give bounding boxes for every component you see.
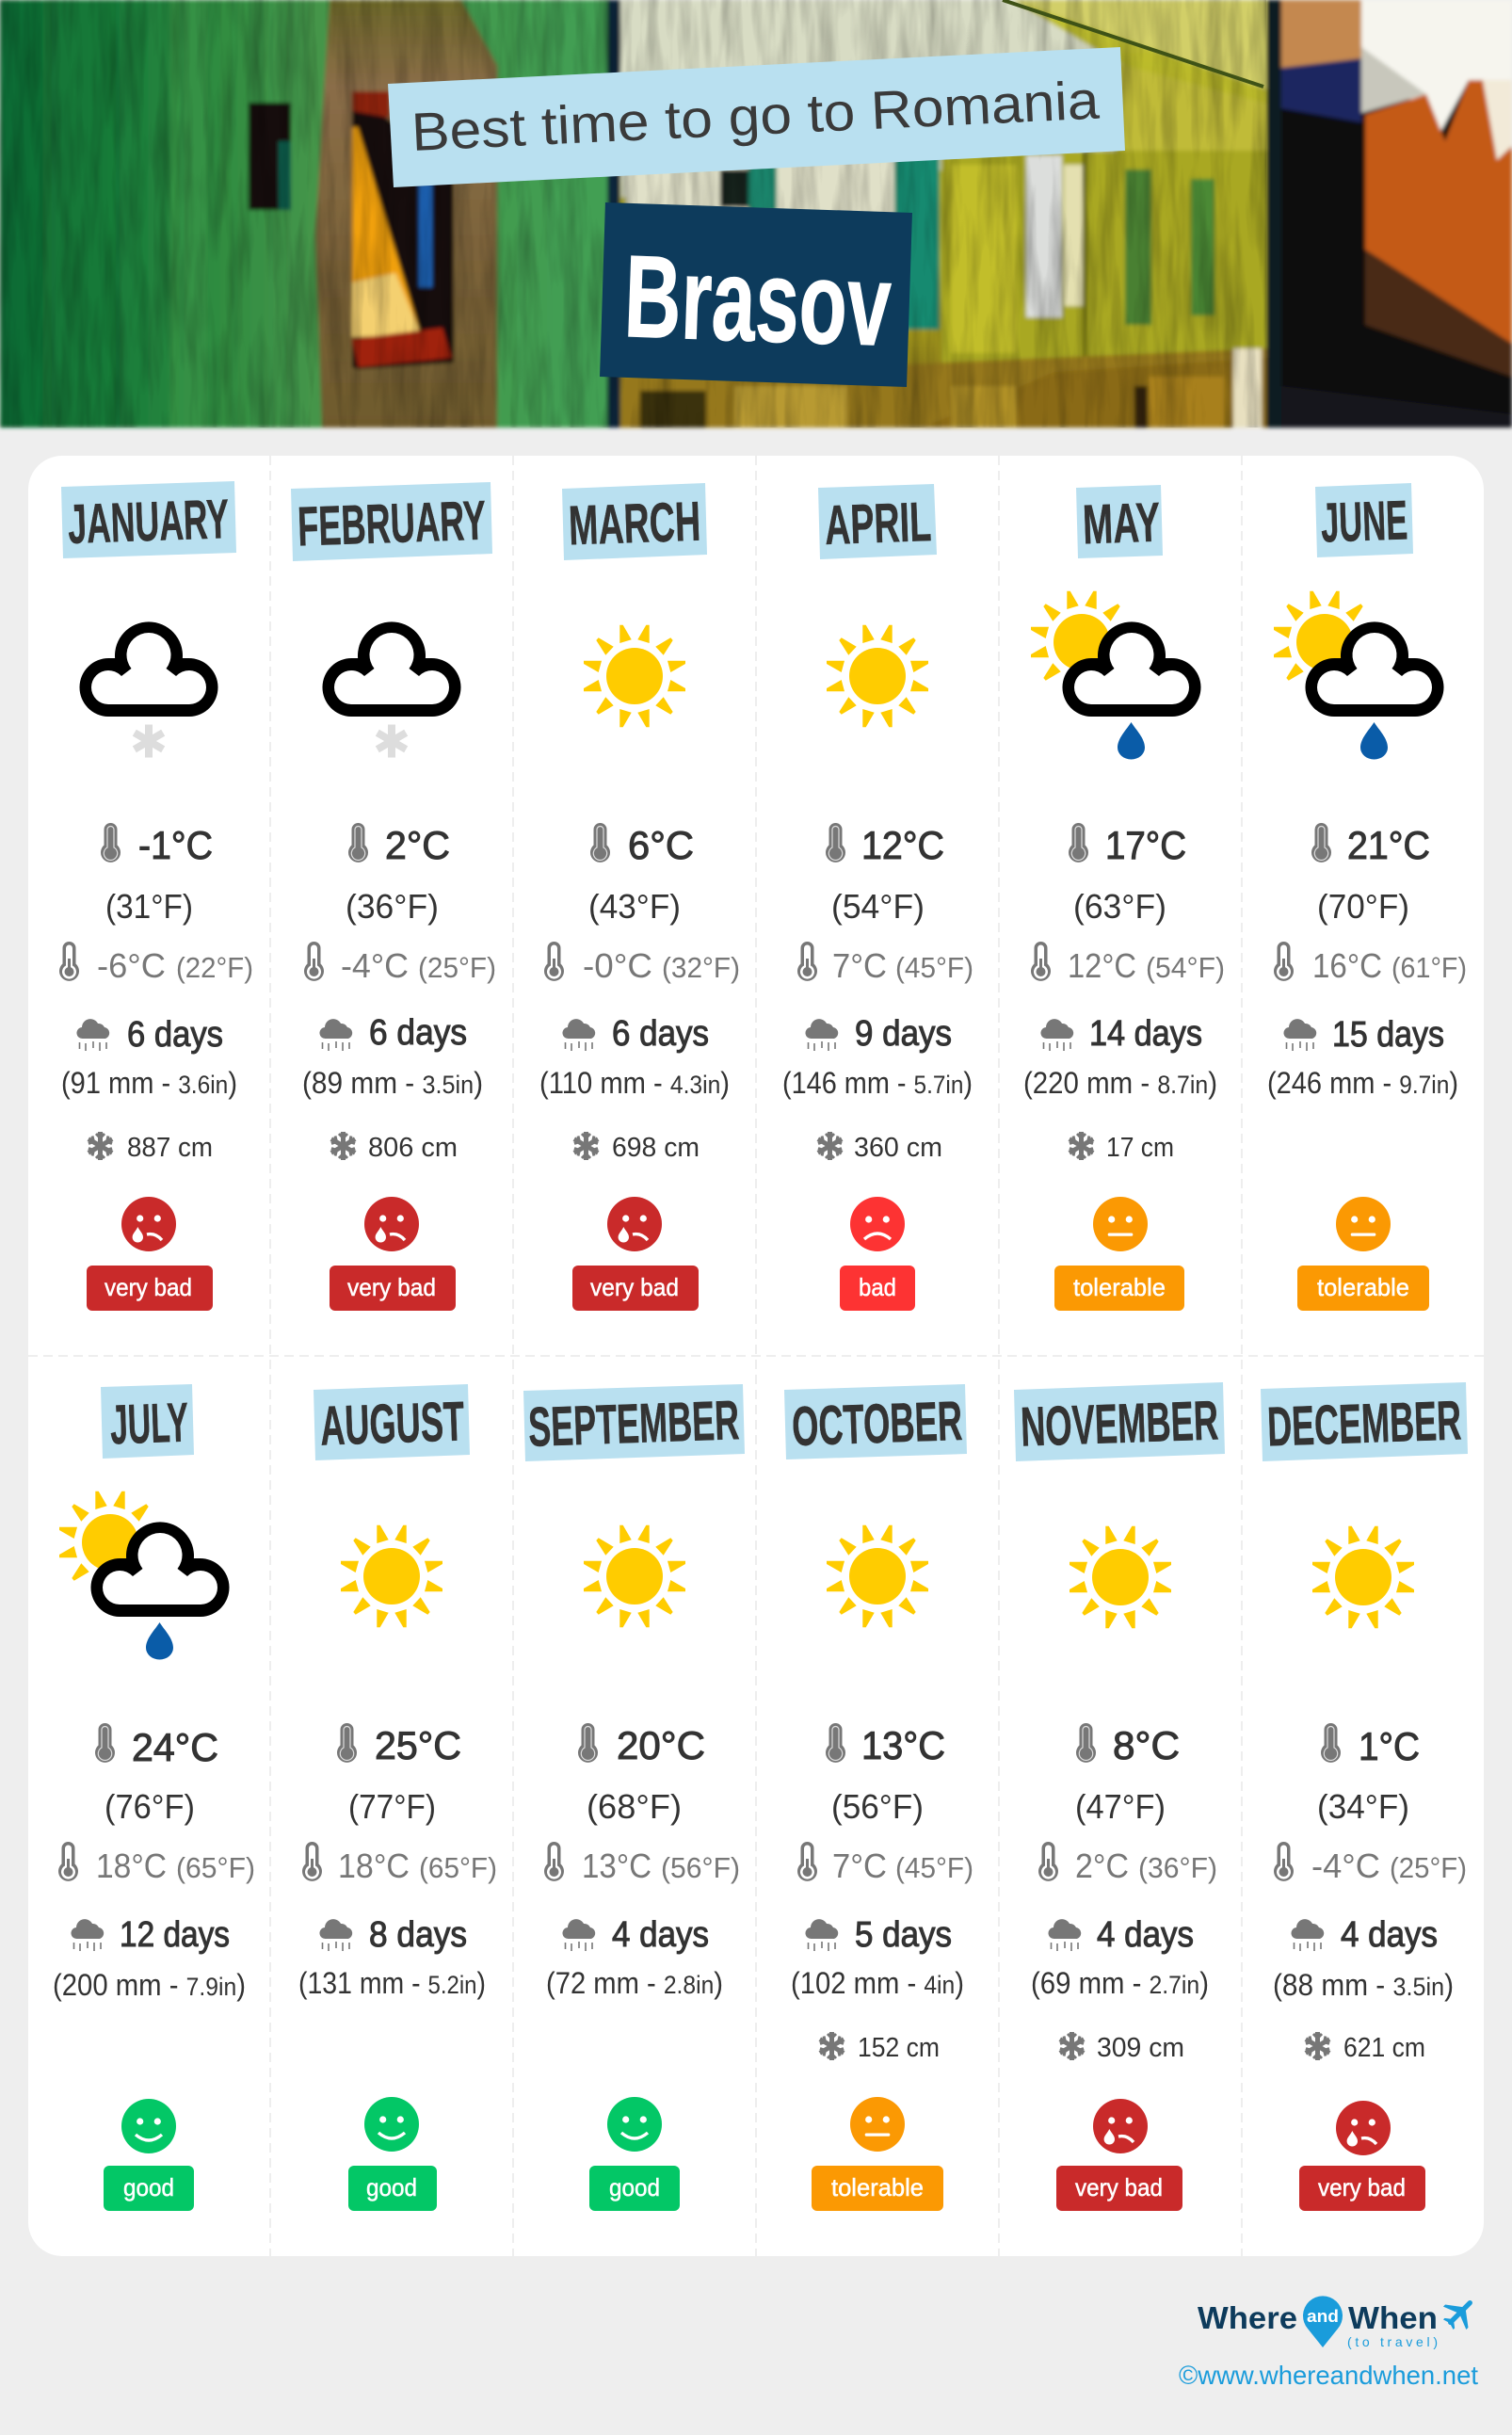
high temperature	[101, 823, 213, 867]
rating face	[121, 2099, 176, 2153]
low temperature	[1038, 1842, 1217, 1885]
month heading: JUNE	[1320, 489, 1408, 555]
high temperature: 12°C	[861, 823, 944, 867]
low temperature: 16°C	[1312, 946, 1382, 985]
snowfall: 887 cm	[127, 1133, 213, 1163]
snowfall: 621 cm	[1343, 2033, 1425, 2063]
low temperature	[1274, 942, 1467, 985]
low temperature: 18°C	[338, 1846, 410, 1885]
low temperature: (25°F)	[418, 951, 496, 984]
weather icon: sun	[584, 625, 685, 727]
low temperature: (61°F)	[1391, 951, 1467, 984]
rating badge	[348, 2166, 437, 2211]
rating badge	[812, 2166, 943, 2211]
rating face	[1093, 2099, 1148, 2153]
rating badge	[572, 1266, 699, 1311]
low temperature: -4°C	[341, 946, 409, 985]
rating badge: tolerable	[1073, 1273, 1166, 1301]
precipitation: (200 mm - 7.9in)	[53, 1968, 246, 2002]
rainy days	[319, 1915, 467, 1955]
low temperature	[797, 942, 973, 985]
precipitation: (131 mm - 5.2in)	[298, 1966, 486, 2000]
panel: February	[291, 482, 496, 1311]
low temperature: 7°C	[832, 946, 887, 985]
logo: Where and When to travel: When	[1348, 2300, 1438, 2335]
month heading: OCTOBER	[791, 1390, 963, 1458]
high temperature: 2°C	[385, 823, 450, 867]
low temperature	[304, 942, 496, 985]
weather icon: sun	[827, 625, 928, 727]
rainy days	[805, 1915, 952, 1955]
weather icon: sun	[1070, 1526, 1171, 1628]
precipitation: (72 mm - 2.8in)	[546, 1966, 723, 2000]
low temperature: -4°C	[1311, 1846, 1380, 1885]
high temperature fahrenheit: (63°F)	[1073, 887, 1166, 926]
high temperature: 20°C	[617, 1723, 705, 1767]
low temperature: (45°F)	[895, 951, 973, 984]
precipitation: (69 mm - 2.7in)	[1031, 1966, 1209, 2000]
high temperature	[1069, 823, 1186, 867]
month heading	[562, 483, 707, 560]
month heading: APRIL	[824, 491, 932, 556]
precipitation: (89 mm - 3.5in)	[302, 1066, 483, 1100]
precipitation: (91 mm - 3.6in)	[61, 1066, 237, 1100]
panel: August	[298, 1384, 497, 2211]
month heading: MAY	[1082, 492, 1161, 556]
high temperature: 6°C	[628, 823, 694, 867]
rating badge: good	[609, 2173, 660, 2201]
title banner: Best time to go to Romania	[388, 47, 1125, 187]
logo: Where and When to travel	[1198, 2290, 1483, 2349]
low temperature: 18°C	[96, 1846, 167, 1885]
rating badge: very bad	[347, 1273, 436, 1301]
rainy days	[1283, 1015, 1444, 1055]
rainy days	[805, 1014, 952, 1054]
low temperature	[59, 942, 253, 985]
high temperature fahrenheit: (56°F)	[831, 1787, 924, 1826]
snowfall: 360 cm	[854, 1133, 942, 1163]
panel: October	[784, 1384, 973, 2211]
rating badge: good	[123, 2173, 174, 2201]
low temperature: 13°C	[582, 1846, 651, 1885]
rainy days: 4 days	[1341, 1915, 1438, 1955]
high temperature fahrenheit: (34°F)	[1317, 1787, 1409, 1826]
month heading: JULY	[109, 1392, 189, 1456]
low temperature: (32°F)	[662, 951, 740, 984]
high temperature fahrenheit: (77°F)	[348, 1787, 436, 1826]
rainy days	[562, 1915, 709, 1955]
low temperature: (54°F)	[1146, 951, 1225, 984]
rainy days	[76, 1015, 223, 1055]
rating badge	[1299, 2166, 1425, 2211]
website credit: ©www.whereandwhen.net	[1179, 2361, 1478, 2390]
high temperature fahrenheit: (36°F)	[346, 887, 439, 926]
weather icon: sun	[584, 1525, 685, 1627]
high temperature: 21°C	[1347, 823, 1430, 867]
rainy days: 12 days	[120, 1915, 230, 1955]
high temperature fahrenheit: (70°F)	[1317, 887, 1409, 926]
month heading	[1076, 485, 1163, 558]
rating face	[607, 1197, 662, 1251]
weather icon: sun	[341, 1525, 442, 1627]
month heading	[101, 1384, 194, 1459]
month heading: AUGUST	[319, 1390, 465, 1458]
month heading: MARCH	[568, 491, 701, 556]
precipitation: (146 mm - 5.7in)	[782, 1066, 973, 1100]
snowfall	[820, 2032, 940, 2063]
high temperature fahrenheit: (54°F)	[831, 887, 925, 926]
snowfall	[331, 1132, 458, 1163]
high temperature	[348, 823, 450, 867]
high temperature: 17°C	[1105, 823, 1186, 867]
precipitation: (110 mm - 4.3in)	[539, 1066, 730, 1100]
weather icon: sun, cloud and rain	[1031, 591, 1201, 759]
logo: Where and When to travel: Where	[1198, 2300, 1297, 2335]
snowfall: 806 cm	[368, 1133, 458, 1163]
rainy days	[1048, 1915, 1194, 1955]
snowfall: 152 cm	[858, 2033, 940, 2063]
low temperature: (65°F)	[176, 1851, 255, 1884]
low temperature: (22°F)	[176, 951, 253, 984]
month heading	[1315, 483, 1413, 557]
low temperature	[544, 1842, 740, 1885]
rating face	[121, 1197, 176, 1251]
snowfall	[88, 1132, 213, 1163]
city name banner: Brasov: Brasov	[622, 232, 893, 371]
low temperature	[1031, 942, 1225, 985]
low temperature: 2°C	[1075, 1846, 1129, 1885]
month heading: NOVEMBER	[1020, 1389, 1219, 1459]
month heading: JANUARY	[67, 488, 230, 556]
rainy days: 8 days	[369, 1915, 467, 1955]
rating badge: tolerable	[831, 2173, 924, 2201]
weather icon: sun	[827, 1525, 928, 1627]
logo: Where and When to travel: (to travel)	[1347, 2334, 1438, 2349]
panel: March	[539, 483, 740, 1311]
high temperature fahrenheit: (68°F)	[587, 1787, 682, 1826]
rainy days	[562, 1014, 709, 1054]
weather icon: sun, cloud and rain	[59, 1492, 230, 1659]
high temperature: 25°C	[375, 1723, 461, 1767]
main white panel	[28, 456, 1484, 2256]
city name banner: Brasov	[600, 202, 912, 387]
snowfall: 17 cm	[1106, 1133, 1174, 1163]
rainy days	[1291, 1915, 1438, 1955]
high temperature: 24°C	[132, 1725, 218, 1769]
high temperature	[1311, 823, 1430, 867]
panel: January	[59, 481, 253, 1311]
month heading	[784, 1384, 967, 1459]
icon: airplane	[1437, 2290, 1483, 2336]
low temperature: (25°F)	[1390, 1851, 1467, 1884]
low temperature: (45°F)	[895, 1851, 973, 1884]
low temperature: (65°F)	[419, 1851, 497, 1884]
low temperature: 12°C	[1068, 946, 1136, 985]
high temperature fahrenheit: (31°F)	[105, 887, 193, 926]
rating face	[850, 2097, 905, 2152]
rating face	[1093, 1197, 1148, 1251]
weather icon: sun	[1312, 1526, 1414, 1628]
snowfall	[1060, 2032, 1184, 2063]
rating face	[1336, 2101, 1391, 2155]
high temperature fahrenheit: (76°F)	[105, 1787, 195, 1826]
precipitation: (246 mm - 9.7in)	[1267, 1066, 1458, 1100]
panel: July	[53, 1384, 255, 2211]
precipitation: (220 mm - 8.7in)	[1023, 1066, 1217, 1100]
weather icon: sun, cloud and rain	[1274, 591, 1444, 759]
month heading	[314, 1384, 470, 1460]
rating badge	[1054, 1266, 1184, 1311]
high temperature	[826, 1723, 945, 1767]
icon: map pin	[1303, 2296, 1343, 2347]
low temperature	[1274, 1842, 1467, 1885]
rating badge: very bad	[1075, 2173, 1163, 2201]
low temperature	[544, 942, 740, 985]
snowfall: 309 cm	[1097, 2033, 1184, 2063]
high temperature	[578, 1723, 705, 1767]
rainy days: 4 days	[1097, 1915, 1194, 1955]
month heading	[523, 1384, 745, 1461]
panel: September	[523, 1384, 745, 2211]
rating badge: tolerable	[1317, 1273, 1409, 1301]
weather icon: cloud with snow	[322, 621, 461, 757]
month heading: SEPTEMBER	[527, 1389, 740, 1459]
low temperature: (36°F)	[1138, 1851, 1217, 1884]
low temperature	[302, 1842, 497, 1885]
rating face	[850, 1197, 905, 1251]
high temperature: 13°C	[861, 1723, 945, 1767]
rating face	[607, 2097, 662, 2152]
snowfall	[1306, 2032, 1425, 2063]
high temperature: -1°C	[138, 823, 213, 867]
panel: November	[1014, 1382, 1225, 2211]
snowfall	[1070, 1132, 1174, 1163]
low temperature: 7°C	[832, 1846, 887, 1885]
high temperature fahrenheit: (47°F)	[1075, 1787, 1166, 1826]
rainy days: 5 days	[855, 1915, 952, 1955]
rating badge: very bad	[590, 1273, 679, 1301]
rainy days: 6 days	[127, 1015, 223, 1055]
month heading	[818, 484, 937, 559]
low temperature: -6°C	[97, 946, 166, 985]
rating badge	[330, 1266, 456, 1311]
high temperature	[1076, 1723, 1180, 1767]
rainy days: 6 days	[612, 1014, 709, 1054]
rainy days: 15 days	[1332, 1015, 1444, 1055]
month heading	[1014, 1382, 1225, 1461]
high temperature fahrenheit: (43°F)	[588, 887, 681, 926]
rating badge: good	[366, 2173, 417, 2201]
rating badge	[589, 2166, 680, 2211]
low temperature	[797, 1842, 973, 1885]
panel: December	[1261, 1382, 1468, 2211]
high temperature	[337, 1723, 461, 1767]
rating badge: very bad	[1318, 2173, 1406, 2201]
rating face	[1336, 1197, 1391, 1251]
high temperature	[590, 823, 694, 867]
rating face	[364, 2097, 419, 2152]
panel: May	[1023, 485, 1225, 1311]
precipitation: (102 mm - 4in)	[791, 1966, 964, 2000]
title banner: Best time to go to Romania: Best time to go to Romania	[410, 71, 1101, 163]
high temperature	[826, 823, 944, 867]
low temperature: (56°F)	[661, 1851, 740, 1884]
month heading	[291, 482, 492, 561]
month heading: FEBRUARY	[297, 490, 487, 557]
month heading	[61, 481, 236, 558]
rainy days	[319, 1013, 467, 1053]
rainy days: 9 days	[855, 1014, 952, 1054]
rating badge	[1056, 2166, 1182, 2211]
high temperature	[1321, 1723, 1420, 1768]
snowfall	[574, 1132, 700, 1163]
rainy days: 6 days	[369, 1013, 467, 1053]
high temperature: 8°C	[1113, 1723, 1180, 1767]
rating badge	[104, 2166, 194, 2211]
logo: Where and When to travel: and	[1307, 2307, 1339, 2326]
rating face	[364, 1197, 419, 1251]
weather icon: cloud with snow	[79, 621, 218, 757]
high temperature	[95, 1723, 218, 1769]
snowfall: 698 cm	[612, 1133, 700, 1163]
rating badge: very bad	[105, 1273, 192, 1301]
high temperature: 1°C	[1359, 1724, 1420, 1768]
rainy days	[1040, 1014, 1202, 1054]
snowfall	[818, 1132, 942, 1163]
rating badge	[87, 1266, 213, 1311]
rainy days	[71, 1915, 230, 1955]
hero photo: old town street	[0, 0, 1512, 427]
low temperature: -0°C	[583, 946, 652, 985]
rating badge	[840, 1266, 915, 1311]
rating badge	[1297, 1266, 1429, 1311]
rainy days: 14 days	[1089, 1014, 1202, 1054]
precipitation: (88 mm - 3.5in)	[1273, 1968, 1454, 2002]
rating badge: bad	[859, 1273, 896, 1301]
rainy days: 4 days	[612, 1915, 709, 1955]
panel: June	[1267, 483, 1467, 1311]
panel: April	[782, 484, 973, 1311]
low temperature	[58, 1842, 255, 1885]
